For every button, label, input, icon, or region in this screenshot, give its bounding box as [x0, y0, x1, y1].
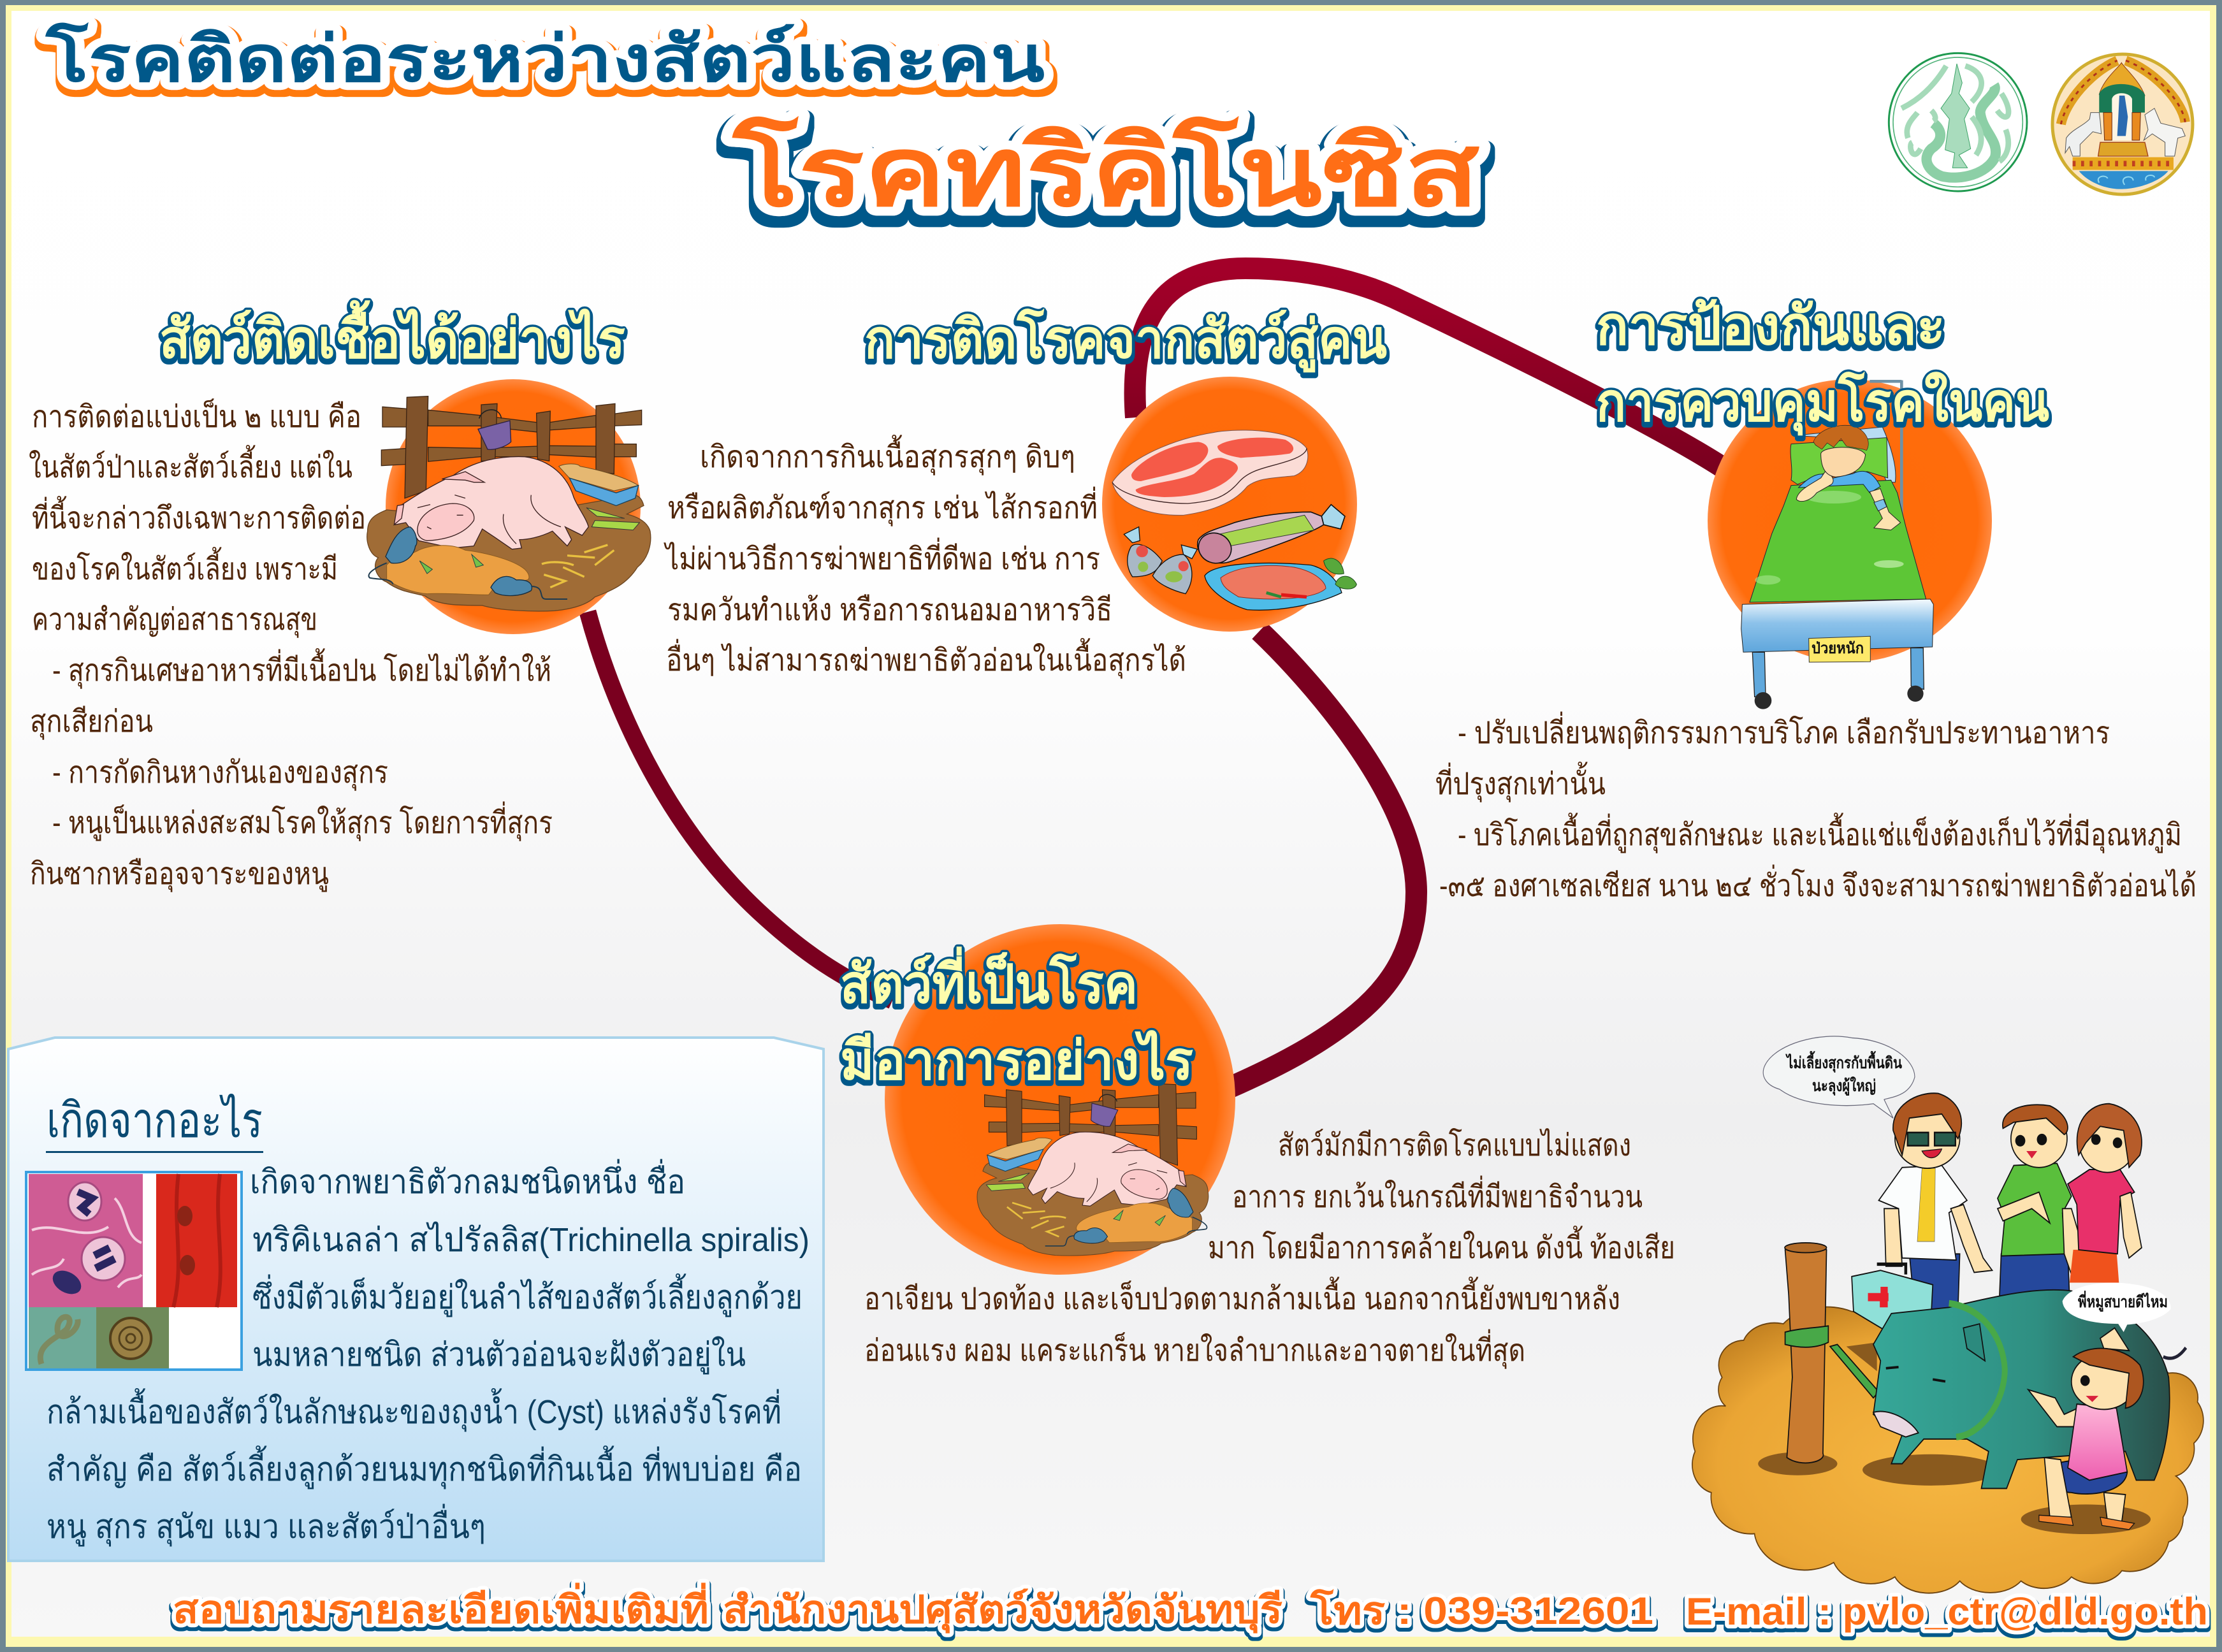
woman [2068, 1104, 2142, 1283]
blanket [1750, 480, 1926, 602]
panel body text: ซึ่งมีตัวเต็มวัยอยู่ในลำไส้ของสัตว์เลี้ยงลูกด้วย [252, 1273, 802, 1317]
child [2028, 1328, 2144, 1530]
footer contact line: สำนักงานปศุสัตว์จังหวัดจันทบุรี [723, 1588, 1282, 1634]
text block: prevention [1435, 711, 2197, 903]
text block: how animals get infected: ความสำคัญต่อสาธารณสุข [32, 603, 317, 638]
illustration: sick pig in pen [977, 1083, 1209, 1256]
text block: how animals get infected: - หนูเป็นแหล่งสะสมโรคให้สุกร โดยการที่สุกร [52, 801, 553, 841]
text block: human infection: ไม่ผ่านวิธีการฆ่าพยาธิที่ดีพอ เช่น การ [663, 537, 1100, 576]
text block: symptoms: มาก โดยมีอาการคล้ายในคน ดังนี้ ท้องเสีย [1208, 1226, 1675, 1265]
text block: how animals get infected: ในสัตว์ป่าและสัตว์เลี้ยง แต่ใน [29, 445, 352, 484]
micrograph collage [26, 1172, 242, 1370]
panel heading: เกิดจากอะไร [47, 1093, 263, 1148]
heading: prevention and control [1596, 296, 2049, 436]
logo: department seal [1889, 53, 2027, 191]
text block: human infection: รมควันทำแห้ง หรือการถนอมอาหารวิธี [667, 593, 1112, 627]
connecting ribbon: meat to sick animal [1230, 631, 1416, 1087]
post and rope [1785, 1243, 1878, 1463]
text block: symptoms: อาการ ยกเว้นในกรณีที่มีพยาธิจำนวน [1232, 1175, 1643, 1214]
ground [1692, 1307, 2204, 1593]
speech bubble text: child: พี่หมูสบายดีไหม [2078, 1291, 2168, 1312]
text block: human infection: เกิดจากการกินเนื้อสุกรสุกๆ ดิบๆ [700, 435, 1075, 475]
footer contact line: สอบถามรายละเอียดเพิ่มเติมที่ [173, 1583, 709, 1631]
panel body text: กล้ามเนื้อของสัตว์ในลักษณะของถุงน้ำ (Cyst) แหล่งรังโรคที่ [47, 1388, 781, 1432]
speech bubble: vet [1763, 1036, 1915, 1118]
connecting ribbon: pig to sick animal [588, 612, 892, 1001]
circle: prevention [1708, 379, 1992, 662]
connecting ribbon: meat to patient [1135, 268, 1724, 468]
illustration: pig in pen [367, 396, 651, 611]
text block: how animals get infected [29, 398, 553, 892]
speech bubble: child [2063, 1283, 2170, 1332]
bed chart text: ป่วยหนัก [1812, 640, 1864, 657]
icon: sausage [1195, 505, 1345, 568]
first aid kit [1852, 1264, 1933, 1332]
heading: how animals get infected: สัตว์ติดเชื้อได้อย่างไร [159, 300, 625, 369]
bed chart [1809, 636, 1870, 662]
logo: province seal [2052, 54, 2193, 194]
heading: animal to human transmission: การติดโรคจากสัตว์สู่คน [864, 308, 1387, 373]
text block: human infection: หรือผลิตภัณฑ์จากสุกร เช่น ไส้กรอกที่ [667, 486, 1098, 526]
text block: how animals get infected: สุกเสียก่อน [30, 705, 153, 740]
illustration: pork products [1112, 430, 1356, 610]
text block: symptoms: อาเจียน ปวดท้อง และเจ็บปวดตามกล้ามเนื้อ นอกจากนี้ยังพบขาหลัง [864, 1277, 1620, 1316]
bed legs and wheels [1752, 648, 1924, 709]
subtitle: zoonotic diseases: โรคติดต่อระหว่างสัตว์และคน [45, 22, 1045, 95]
text block: human infection [663, 435, 1186, 679]
iv stand [1870, 380, 1901, 516]
main title: trichinosis: โรคทริคิโนซิส [731, 116, 1479, 226]
text block: prevention: ที่ปรุงสุกเท่านั้น [1435, 762, 1606, 802]
text block: how animals get infected: ที่นี้จะกล่าวถึงเฉพาะการติดต่อ [32, 496, 366, 535]
panel body text: หนู สุกร สุนัข แมว และสัตว์ป่าอื่นๆ [47, 1503, 486, 1547]
text block: human infection: อื่นๆ ไม่สามารถฆ่าพยาธิตัวอ่อนในเนื้อสุกรได้ [666, 638, 1186, 679]
text block: symptoms [864, 1127, 1675, 1369]
circle: infection to humans [1102, 377, 1357, 632]
ground shadows [1758, 1342, 2151, 1534]
text block: symptoms: สัตว์มักมีการติดโรคแบบไม่แสดง [1278, 1127, 1631, 1163]
icon: raw steak [1112, 430, 1308, 515]
circle: infection in animals [386, 379, 641, 634]
patient [1796, 425, 1901, 530]
panel body text: นมหลายชนิด ส่วนตัวอ่อนจะฝังตัวอยู่ใน [252, 1336, 746, 1375]
vet [1878, 1093, 1992, 1310]
icon: plate of food [1205, 558, 1356, 610]
black pig [1873, 1290, 2186, 1488]
panel body text [47, 1159, 810, 1547]
illustration: vet visits pig farm [1692, 1036, 2204, 1593]
text block: prevention: - ปรับเปลี่ยนพฤติกรรมการบริโภค เลือกรับประทานอาหาร [1458, 711, 2110, 750]
heading: prevention and control: การป้องกันและ [1596, 296, 1945, 356]
footer contact line: E-mail : pvlo_ctr@dld.go.th [1686, 1590, 2208, 1633]
heading: prevention and control: การควบคุมโรคในคน [1596, 372, 2049, 436]
heading: symptoms in animals [840, 946, 1193, 1090]
text block: symptoms: อ่อนแรง ผอม แคระแกร็น หายใจลำบากและอาจตายในที่สุด [864, 1329, 1525, 1369]
text block: how animals get infected: กินซากหรืออุจจาระของหนู [30, 857, 329, 892]
speech bubble text: vet: นะลุงผู้ใหญ่ [1812, 1076, 1876, 1096]
illustration: patient in bed [1741, 380, 1933, 709]
panel: cause [8, 1038, 824, 1561]
speech bubble text: vet [1785, 1050, 1902, 1096]
text block: how animals get infected: - สุกรกินเศษอาหารที่มีเนื้อปน โดยไม่ได้ทำให้ [52, 648, 551, 689]
text block: how animals get infected: - การกัดกินหางกันเองของสุกร [52, 756, 388, 791]
heading: symptoms in animals: มีอาการอย่างไร [840, 1030, 1193, 1090]
icon: sour pork bags [1124, 527, 1197, 594]
footer contact line: โทร : 039-312601 [1310, 1588, 1653, 1632]
bed base [1741, 599, 1933, 652]
speech bubble text: vet: ไม่เลี้ยงสุกรกับพื้นดิน [1785, 1050, 1902, 1073]
headboard [1794, 427, 1896, 482]
footer contact line [173, 1583, 2208, 1634]
panel body text: ทริคิเนลล่า สไปรัลลิส(Trichinella spiralis) [252, 1221, 810, 1259]
pillow [1790, 438, 1888, 484]
panel body text: สำคัญ คือ สัตว์เลี้ยงลูกด้วยนมทุกชนิดที่กินเนื้อ ที่พบบ่อย คือ [47, 1446, 802, 1489]
heading: symptoms in animals: สัตว์ที่เป็นโรค [840, 946, 1138, 1014]
circle: symptoms [885, 924, 1235, 1275]
boy [1998, 1105, 2086, 1299]
text block: how animals get infected: การติดต่อแบ่งเป็น ๒ แบบ คือ [32, 398, 361, 434]
text block: how animals get infected: ของโรคในสัตว์เลี้ยง เพราะมี [32, 547, 338, 586]
panel body text: เกิดจากพยาธิตัวกลมชนิดหนึ่ง ชื่อ [250, 1159, 685, 1201]
